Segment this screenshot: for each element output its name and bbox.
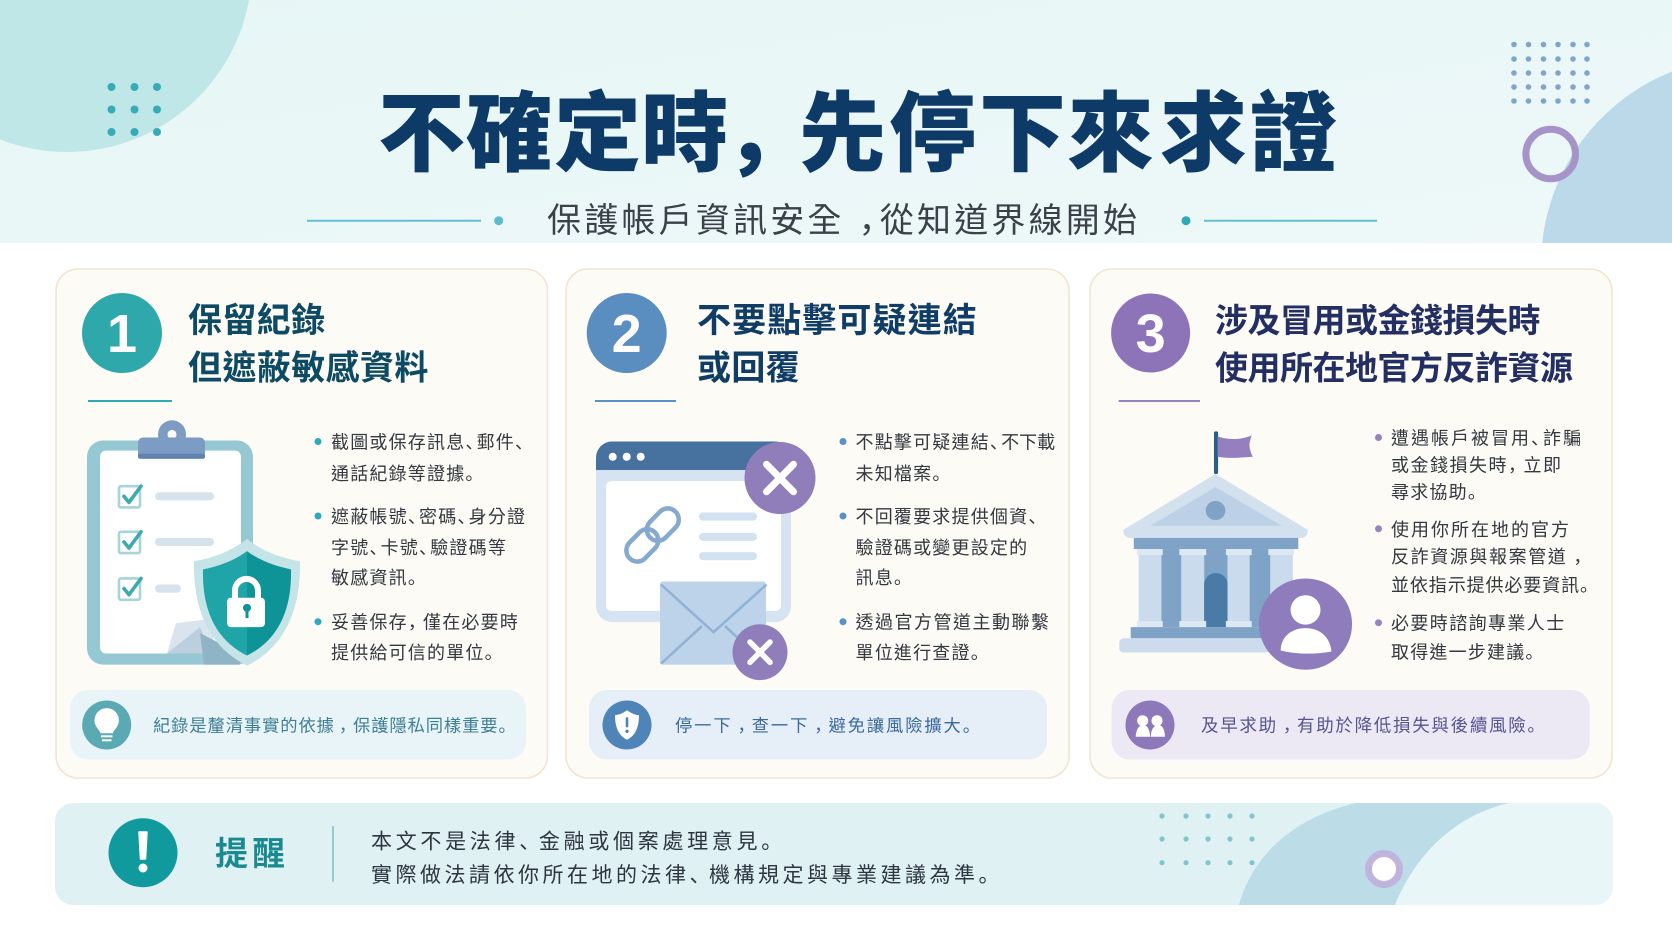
bullet list 1: 通話紀錄等證據。 [331,464,485,484]
bullet list 3 [1375,428,1599,662]
bullet list 2 [840,432,1055,663]
number badge 3: 3 [1136,304,1166,364]
bullet list 2: 透過官方管道主動聯繫 [856,613,1050,633]
heading 2 [697,302,978,388]
number badge 2: 2 [612,304,642,364]
callout 2: 停一下 ，查一下 ，避免讓風險擴大。 [675,716,982,736]
bullet list 1: 妥善保存，僅在必要時 [331,613,519,633]
bullet list 1: 截圖或保存訊息、郵件、 [331,432,534,452]
callout 1: 紀錄是釐清事實的依據，保護隱私同樣重要。 [153,716,517,736]
callout 3: 及早求助 ，有助於降低損失與後續風險。 [1201,716,1547,736]
heading 3 [1215,302,1573,386]
header banner [0,0,1672,243]
reminder text: 本文不是法律、金融或個案處理意見。 [371,830,786,854]
number badge 1: 1 [107,304,137,364]
heading 2: 或回覆 [697,350,800,388]
title [378,86,1337,183]
title: ， [724,86,811,183]
icon: exclamation [108,818,178,887]
subtitle: 保護帳戶資訊安全 ，從知道界線開始 [547,202,1140,240]
callout 2 [589,690,1047,760]
reminder label: 提醒 [215,835,289,872]
heading 1 [188,302,429,388]
icon: government building with person [1119,431,1352,670]
bullet list 2: 單位進行查證。 [856,643,990,663]
bullet list 2: 未知檔案。 [856,464,952,484]
bullet list 3: 遭遇帳戶被冒用、詐騙 [1391,428,1583,448]
subtitle [307,202,1377,240]
title: 不確定時 [378,86,728,183]
bullet list 1: 遮蔽帳號、密碼、身分證 [331,507,526,527]
bullet list 3: 反詐資源與報案管道 ， [1391,547,1593,567]
panel: 2 do not click [566,269,1069,778]
icon: browser window and envelope [596,442,816,680]
reminder text [371,830,1003,887]
bullet list 3: 尋求協助。 [1391,483,1487,503]
bullet list 2: 驗證碼或變更設定的 [856,538,1028,558]
bullet list 2: 不回覆要求提供個資、 [856,507,1048,527]
bullet list 3: 使用你所在地的官方 [1391,520,1571,540]
bullet list 3: 取得進一步建議。 [1391,642,1545,662]
bullet list 3: 或金錢損失時，立即 [1391,456,1562,476]
callout 1 [70,690,526,760]
callout 3 [1112,690,1590,760]
bullet list 1 [314,432,534,663]
bullet list 1: 字號、卡號、驗證碼等 [331,538,507,558]
number badge 1 [82,293,162,373]
bullet list 2: 不點擊可疑連結、不下載 [856,432,1055,452]
heading 3: 涉及冒用或金錢損失時 [1215,302,1540,339]
heading 2: 不要點擊可疑連結 [697,302,978,340]
reminder text: 實際做法請依你所在地的法律、機構規定與專業建議為準。 [371,864,1003,887]
title: 先停下來求證 [799,86,1337,183]
bullet list 2: 訊息。 [856,568,913,588]
heading 3: 使用所在地官方反詐資源 [1215,350,1573,386]
bullet list 1: 敏感資訊。 [331,567,427,588]
icon: clipboard with shield [87,420,300,666]
panel: 1 keep records [56,269,548,778]
bullet list 3: 並依指示提供必要資訊。 [1391,576,1599,596]
heading 1: 保留紀錄 [188,302,326,340]
heading 1: 但遮蔽敏感資料 [188,350,429,388]
bullet list 3: 必要時諮詢專業人士 [1391,614,1566,634]
panel: reminder banner [55,803,1619,905]
number badge 3 [1111,294,1190,372]
number badge 2 [587,293,667,373]
bullet list 1: 提供給可信的單位。 [331,643,504,663]
panel: 3 official resources [1090,269,1612,778]
